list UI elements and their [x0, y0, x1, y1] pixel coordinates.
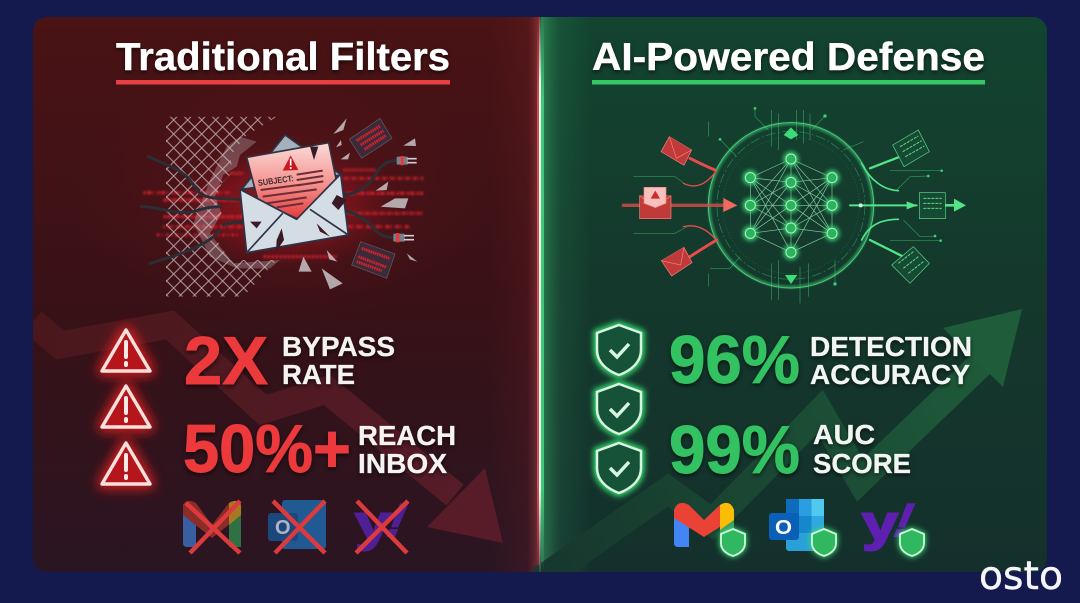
- icon: protected gmail: [674, 503, 734, 547]
- envelope front: [240, 174, 348, 253]
- illustration: envelope breaking through fence: [142, 117, 423, 300]
- neural network nodes: [743, 151, 840, 260]
- stat: 96% detection accuracy: [669, 322, 972, 398]
- icon: protected outlook: O: [775, 517, 792, 539]
- data cards: [349, 118, 395, 278]
- stat: 2x bypass rate: 2X: [184, 323, 268, 399]
- stat: 96% detection accuracy: 96%: [669, 322, 800, 398]
- stat: 2x bypass rate: [184, 323, 395, 399]
- stat: 99% auc score: SCORE: [813, 448, 911, 479]
- icon: mini shields: [721, 529, 924, 556]
- icon: check shields: [597, 325, 641, 493]
- torn fence edge: [193, 137, 280, 268]
- green streams: [850, 157, 955, 257]
- icon: crossed-out outlook: O: [275, 517, 291, 539]
- check shield 1: [597, 325, 641, 375]
- stat: 2x bypass rate: RATE: [282, 359, 355, 390]
- icon: crossed-out yahoo: [355, 495, 415, 553]
- stat: 96% detection accuracy: ACCURACY: [810, 359, 970, 390]
- letter with alert: SUBJECT:: [257, 173, 294, 188]
- heading: traditional filters: Traditional Filters: [116, 36, 450, 79]
- stat: 99% auc score: [669, 412, 911, 488]
- check shield 3: [597, 443, 641, 493]
- chain-link fence: [163, 117, 280, 300]
- icon: protected yahoo: [862, 495, 922, 551]
- circuit traces: [633, 108, 940, 303]
- neural network links: [750, 159, 832, 252]
- panel: traditional filters: [33, 17, 540, 572]
- icon: crossed-out yahoo: y: [355, 495, 391, 551]
- warning triangle 3: [102, 443, 150, 484]
- trace dots: [719, 107, 943, 286]
- glass shards: [299, 118, 417, 289]
- illustration: neural network shield: [623, 107, 966, 303]
- icon: protected yahoo: y: [862, 495, 898, 551]
- background arrow: falling trend: [33, 322, 503, 543]
- stat: 99% auc score: AUC: [813, 419, 875, 450]
- background arrow: rising trend: [540, 309, 1022, 580]
- icon: protected yahoo: !: [886, 496, 922, 547]
- icon: crossed-out outlook: [268, 500, 326, 553]
- plugs: [393, 156, 417, 242]
- stat: 99% auc score: 99%: [669, 412, 800, 488]
- document lines: [898, 136, 942, 273]
- panel: ai-powered defense: [540, 17, 1047, 580]
- stat: 50%+ reach inbox: 50%+: [183, 411, 351, 487]
- letter with alert: [247, 143, 338, 219]
- threat streams: [623, 158, 723, 257]
- warning triangle 1: [102, 330, 150, 371]
- icon: crossed-out yahoo: !: [379, 496, 415, 547]
- heading: ai-powered defense: AI-Powered Defense: [592, 36, 985, 79]
- warning triangle 2: [102, 386, 150, 427]
- icon: crossed-out gmail: [183, 501, 241, 553]
- icon: protected outlook: [769, 499, 824, 551]
- stat: 2x bypass rate: BYPASS: [282, 331, 395, 362]
- top and bottom markers: [784, 127, 798, 284]
- clean documents: [892, 130, 945, 283]
- stat: 50%+ reach inbox: INBOX: [358, 448, 447, 479]
- green arrows: [859, 199, 966, 212]
- cables: [142, 157, 400, 263]
- stat: 96% detection accuracy: DETECTION: [810, 331, 972, 362]
- check shield 2: [597, 384, 641, 434]
- threat arrow: [723, 198, 737, 212]
- brand logo: osto: [979, 554, 1063, 599]
- central divider: [537, 17, 544, 572]
- icon: warning triangles: [102, 330, 150, 484]
- envelope back flap: [242, 135, 341, 189]
- ring: [708, 123, 874, 288]
- envelope cracks: [250, 147, 347, 252]
- red envelopes: [640, 137, 692, 276]
- stat: 50%+ reach inbox: REACH: [358, 420, 456, 451]
- stat: 50%+ reach inbox: [183, 411, 456, 487]
